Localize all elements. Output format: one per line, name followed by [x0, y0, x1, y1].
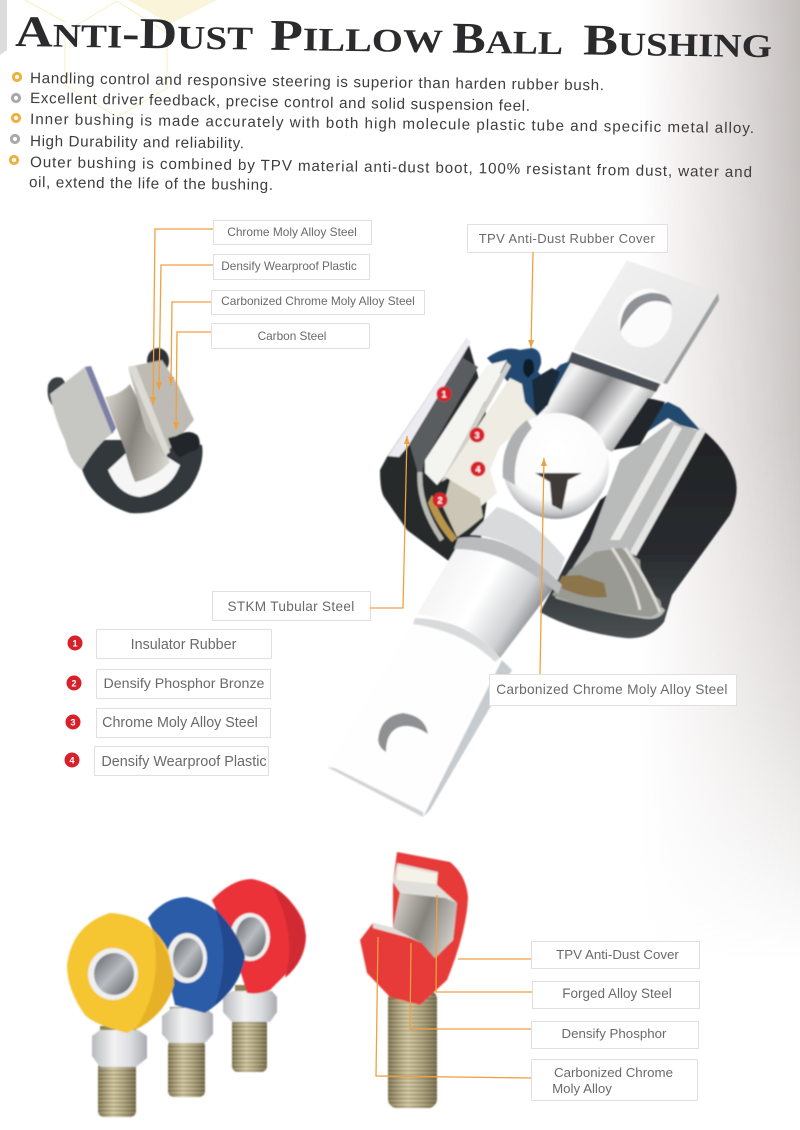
title: PILLOW — [270, 11, 444, 62]
label: carbon steel — [212, 324, 370, 348]
right section — [128, 360, 194, 456]
small bushing callouts — [153, 220, 424, 430]
label: carbonized chrome moly alloy steel: Carbonized Chrome Moly Alloy Steel — [221, 294, 415, 308]
bullet 5 — [10, 154, 752, 194]
three coloured rod ends — [67, 879, 306, 1117]
legend item 4 — [64, 746, 268, 776]
bullet 2: Excellent driver feedback, precise control and solid suspension feel. — [30, 90, 530, 115]
legend item 2: Densify Phosphor Bronze — [104, 676, 265, 692]
small bushing illustration — [48, 348, 202, 513]
outer black ring — [80, 440, 202, 513]
shaft — [417, 542, 557, 658]
number markers on cutaway: 3 — [474, 430, 480, 440]
dark rubber bumps — [147, 348, 169, 374]
label: TPV anti-dust cover — [532, 942, 700, 968]
main bushing callouts — [212, 224, 736, 706]
threaded stud — [388, 990, 437, 1108]
label: carbonized chrome moly alloy steel: Carbonized Chrome Moly Alloy Steel — [496, 682, 728, 697]
blue boot left — [487, 348, 572, 420]
red rod end — [212, 879, 306, 1072]
lower tab — [327, 618, 500, 817]
legend item 1 — [68, 630, 272, 658]
bullet 3: Inner bushing is made accurately with both high molecule plastic tube and specific metal alloy. — [30, 111, 754, 137]
legend item 3 — [66, 708, 270, 738]
bullet list — [10, 70, 754, 194]
legend item 2 — [66, 670, 270, 698]
label: carbonized chrome moly alloy: Carbonized Chrome — [554, 1065, 673, 1080]
legend item 2: 2 — [71, 678, 77, 688]
label: carbonized chrome moly alloy — [532, 1060, 698, 1100]
legend item 4: 4 — [69, 756, 75, 766]
blue rod end — [148, 897, 245, 1097]
ball joint — [503, 413, 609, 519]
title: BALL — [452, 13, 564, 64]
blue boot right — [618, 402, 700, 445]
right rubber body — [540, 428, 737, 638]
label: carbon steel: Carbon Steel — [258, 329, 326, 343]
leader lines — [153, 229, 213, 430]
label: chrome moly alloy steel: Chrome Moly Alloy Steel — [227, 225, 357, 239]
red body — [360, 852, 468, 1005]
cutaway callouts — [376, 895, 700, 1100]
right metal strips — [630, 426, 706, 556]
label: TPV anti-dust rubber cover: TPV Anti-Dust Rubber Cover — [479, 231, 656, 246]
neck cylinder — [538, 352, 661, 452]
bullet 5: Outer bushing is combined by TPV material anti-dust boot, 100% resistant from dust, water and — [30, 154, 752, 181]
label: densify wearproof plastic — [214, 254, 370, 280]
label: STKM tubular steel — [212, 592, 370, 620]
lower interior ring — [552, 548, 661, 617]
legend: material key — [64, 630, 272, 776]
title: ANTI-DUST — [15, 7, 254, 60]
legend item 4: Densify Wearproof Plastic — [101, 754, 267, 770]
number markers on cutaway: 1 — [441, 390, 447, 400]
number markers on cutaway: 2 — [437, 496, 443, 506]
bullet 5: oil, extend the life of the bushing. — [29, 174, 273, 194]
label: chrome moly alloy steel — [214, 220, 372, 244]
outer steel half — [50, 367, 114, 470]
bullet 1: Handling control and responsive steering is superior than harden rubber bush. — [30, 70, 604, 94]
white inner sleeve — [425, 360, 507, 485]
label: densify wearproof plastic: Densify Wearproof Plastic — [221, 259, 357, 273]
title — [15, 7, 772, 67]
right interior metal — [555, 420, 700, 619]
legend item 1: 1 — [72, 638, 78, 648]
main bushing cutaway — [327, 260, 737, 817]
legend item 1: Insulator Rubber — [131, 637, 237, 653]
lower-left metal arcs — [420, 472, 442, 540]
label: forged alloy steel — [532, 982, 700, 1008]
label: forged alloy steel: Forged Alloy Steel — [562, 986, 672, 1001]
label: carbonized chrome moly alloy steel — [212, 290, 424, 314]
label: STKM tubular steel: STKM Tubular Steel — [227, 599, 355, 614]
label: carbonized chrome moly alloy: Moly Alloy — [552, 1081, 612, 1096]
label: carbonized chrome moly alloy steel — [490, 674, 736, 706]
number markers on cutaway — [432, 386, 486, 508]
leader lines — [376, 895, 532, 1078]
bullet 4: High Durability and reliability. — [30, 133, 244, 152]
legend item 3: Chrome Moly Alloy Steel — [102, 715, 258, 731]
plastic liner — [445, 378, 537, 507]
title: BUSHING — [583, 15, 772, 67]
number markers on cutaway: 4 — [475, 464, 481, 474]
left rubber body — [380, 338, 490, 562]
cutaway red rod end — [360, 852, 468, 1108]
label: TPV anti-dust rubber cover — [468, 224, 668, 252]
leader lines — [370, 252, 544, 674]
label: densify phosphor: Densify Phosphor — [562, 1026, 667, 1041]
label: TPV anti-dust cover: TPV Anti-Dust Cover — [556, 947, 679, 962]
inner sleeve — [105, 384, 170, 482]
cut interior — [373, 863, 457, 958]
upper tab — [573, 260, 718, 383]
bronze liner — [443, 480, 483, 537]
yellow rod end — [67, 913, 174, 1117]
label: densify phosphor — [532, 1022, 698, 1048]
legend item 3: 3 — [70, 718, 76, 728]
